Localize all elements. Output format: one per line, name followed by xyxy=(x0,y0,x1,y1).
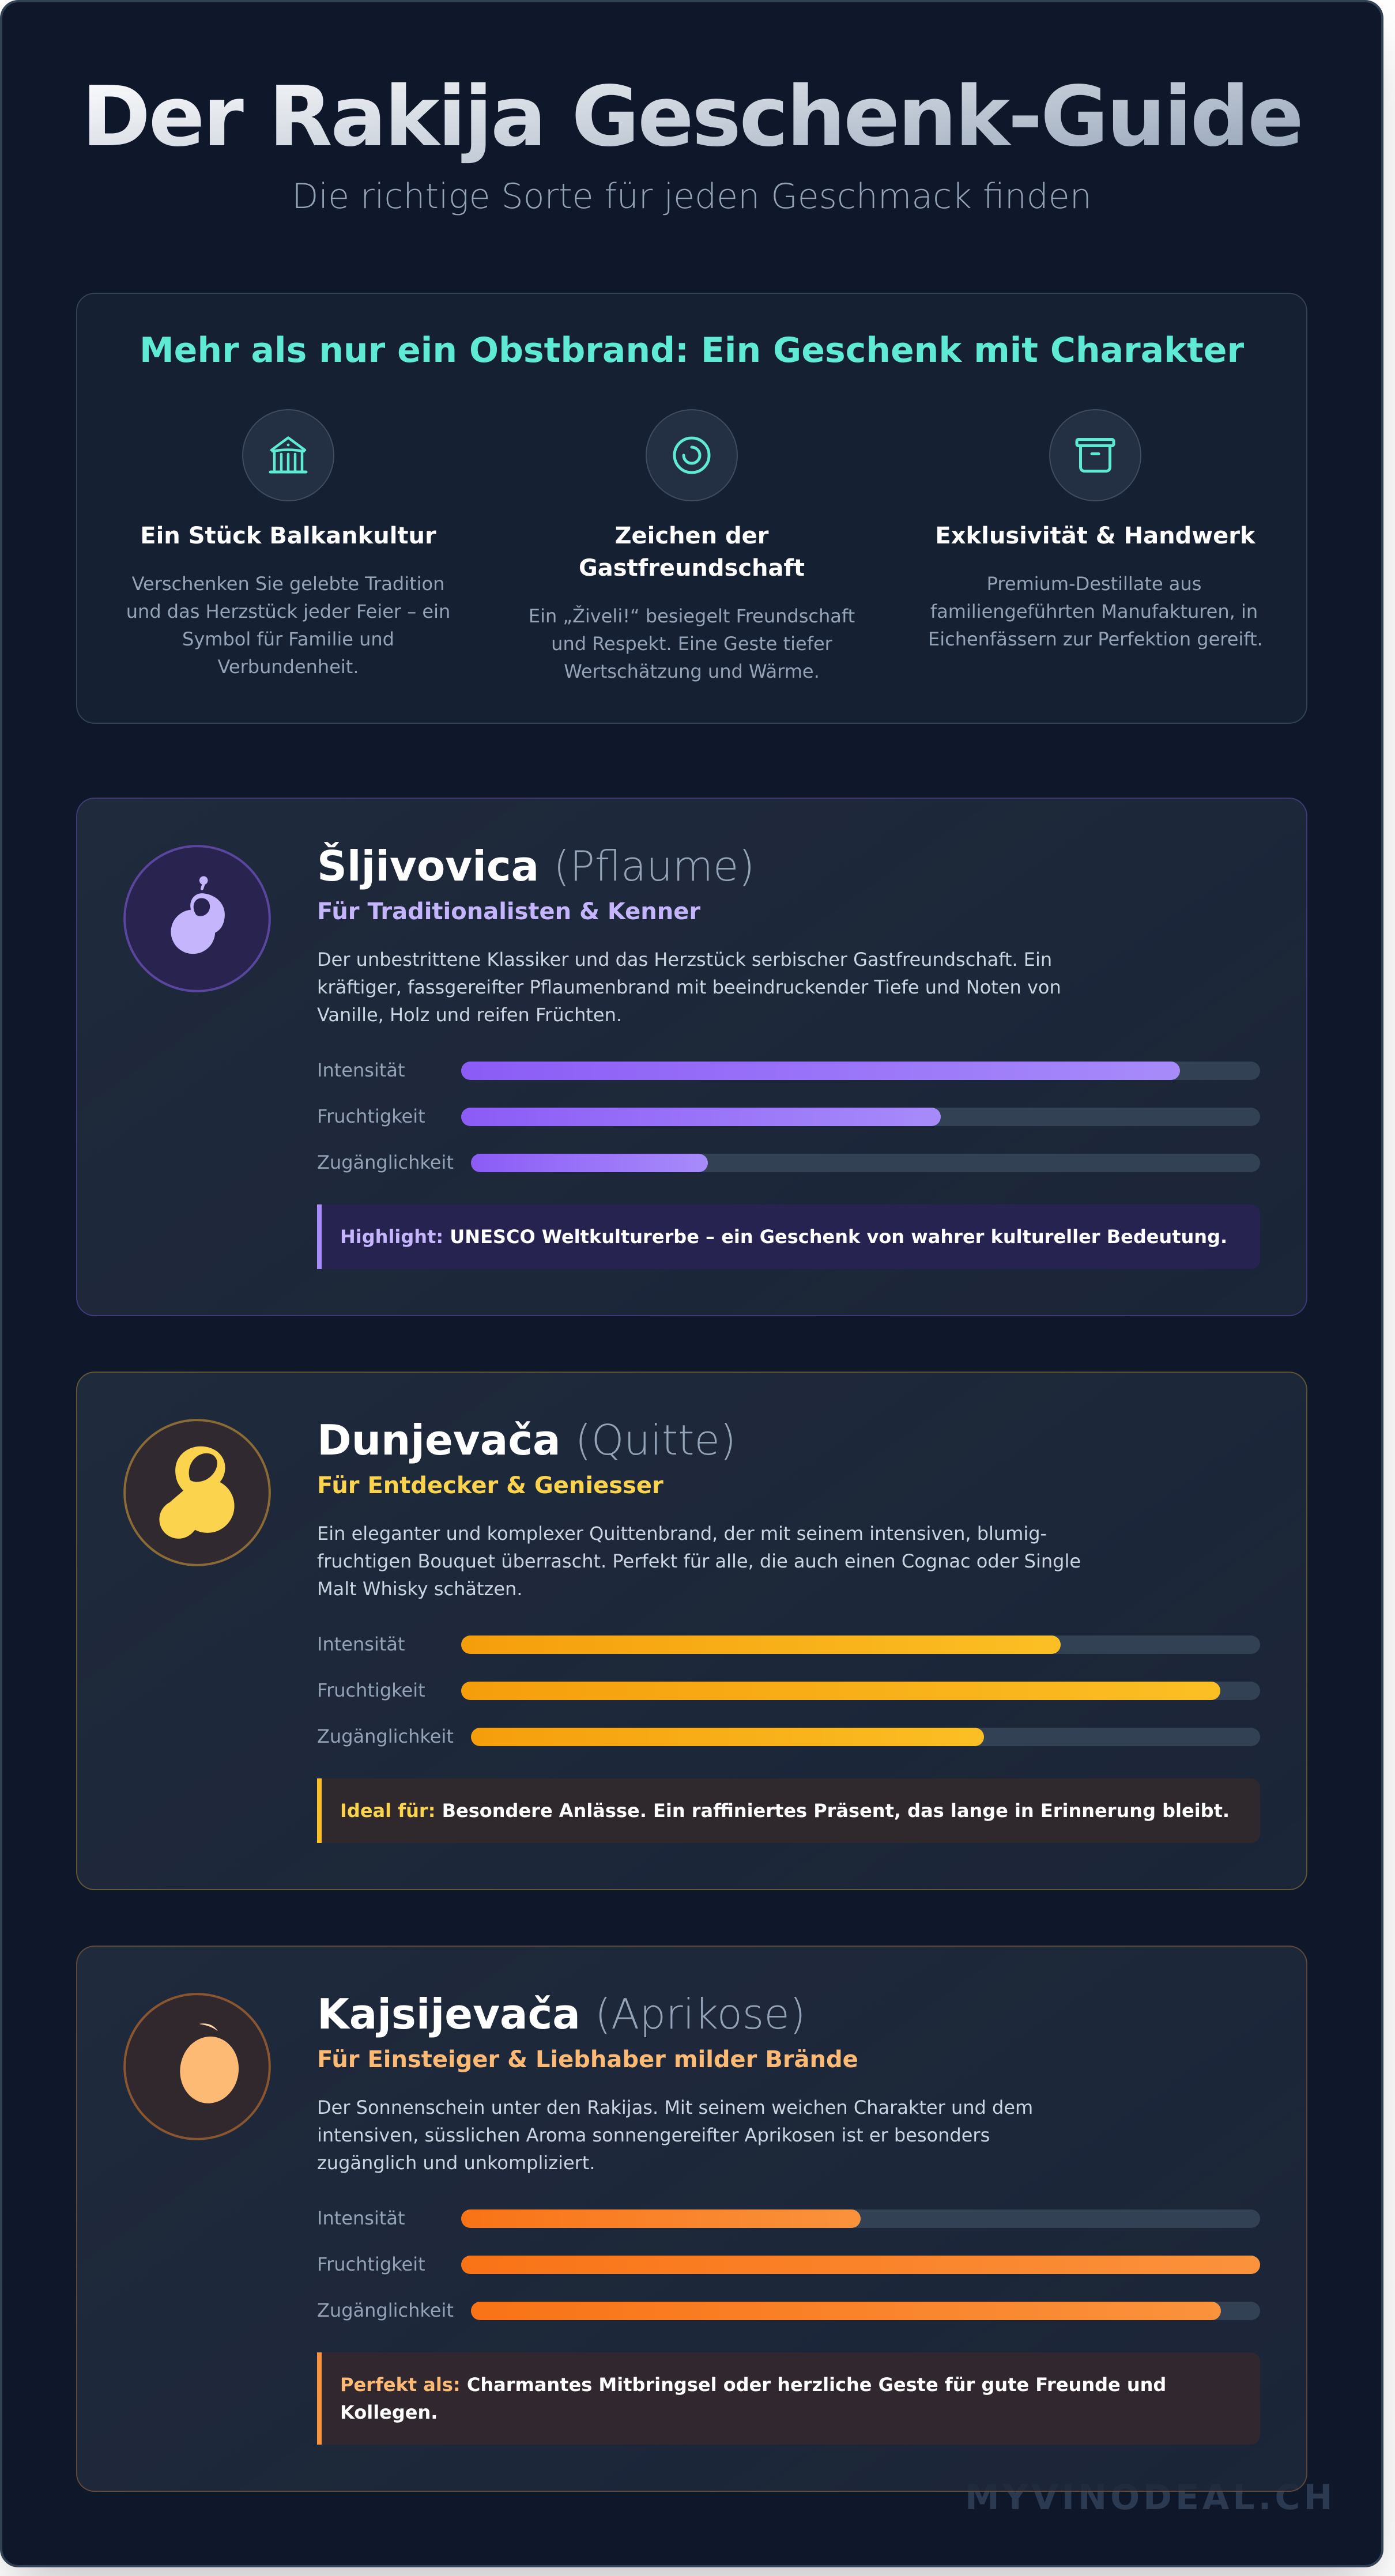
callout xyxy=(317,1204,1260,1269)
callout: Perfekt als: Charmantes Mitbringsel oder herzliche Geste für gute Freunde und xyxy=(340,2374,1166,2396)
description: zugänglich und unkompliziert. xyxy=(317,2152,595,2174)
target audience: Für Entdecker & Geniesser xyxy=(317,1472,663,1499)
bar: Intensität xyxy=(317,1059,1260,1081)
description: fruchtigen Bouquet überrascht. Perfekt für alle, die auch einen Cognac oder Single xyxy=(317,1550,1081,1572)
bar: Zugänglichkeit: Zugänglichkeit xyxy=(317,1151,454,1173)
bar: Fruchtigkeit xyxy=(317,1105,1260,1127)
callout xyxy=(317,2352,1260,2445)
description: intensiven, süsslichen Aroma sonnengereifter Aprikosen ist er besonders xyxy=(317,2124,990,2146)
bar: Zugänglichkeit xyxy=(317,1151,1260,1173)
sort name: Šljivovica (Pflaume) xyxy=(317,842,755,890)
column heading: Exklusivität & Handwerk xyxy=(935,523,1256,549)
description: Vanille, Holz und reifen Früchten. xyxy=(317,1004,622,1026)
callout: Kollegen. xyxy=(340,2401,438,2423)
description: Malt Whisky schätzen. xyxy=(317,1578,522,1600)
watermark: MYVINODEAL.CH xyxy=(965,2477,1336,2518)
description: kräftiger, fassgereifter Pflaumenbrand mit beeindruckender Tiefe und Noten von xyxy=(317,976,1061,998)
column: Gastfreundschaft xyxy=(529,409,855,682)
bar: Intensität xyxy=(317,2205,1260,2233)
column text: und Respekt. Eine Geste tiefer xyxy=(551,633,832,655)
column text: Verbundenheit. xyxy=(218,656,359,678)
intro heading: Mehr als nur ein Obstbrand: Ein Geschenk mit Charakter xyxy=(140,330,1244,371)
bar: Intensität: Intensität xyxy=(317,1059,405,1081)
description xyxy=(317,1523,1081,1600)
icon: box xyxy=(1049,409,1141,501)
column text: Wertschätzung und Wärme. xyxy=(564,660,820,682)
target audience: Für Einsteiger & Liebhaber milder Brände xyxy=(317,2046,858,2073)
column text: Premium-Destillate aus xyxy=(987,573,1201,595)
bar: Zugänglichkeit: Zugänglichkeit xyxy=(317,2299,454,2321)
bar: Intensität xyxy=(317,1633,1260,1655)
icon: temple xyxy=(242,409,334,501)
callout: Highlight: UNESCO Weltkulturerbe – ein Geschenk von wahrer kultureller Bedeutung. xyxy=(340,1226,1227,1248)
bar: Fruchtigkeit xyxy=(317,2251,1260,2279)
bar: Intensität: Intensität xyxy=(317,2207,405,2229)
title: Der Rakija Geschenk-Guide xyxy=(82,68,1302,165)
bar: Fruchtigkeit: Fruchtigkeit xyxy=(317,1105,425,1127)
panel: Šljivovica xyxy=(76,798,1307,1316)
bar: Zugänglichkeit: Zugänglichkeit xyxy=(317,1725,454,1747)
column heading xyxy=(579,523,805,581)
description xyxy=(317,949,1061,1026)
icon: quince xyxy=(123,1419,271,1566)
column: Balkankultur xyxy=(126,409,450,678)
bar: Fruchtigkeit: Fruchtigkeit xyxy=(317,2253,425,2275)
column heading: Zeichen der xyxy=(614,523,769,549)
icon: plum xyxy=(123,845,271,992)
column text xyxy=(529,605,855,682)
column text: Symbol für Familie und xyxy=(182,628,394,650)
description: Der Sonnenschein unter den Rakijas. Mit seinem weichen Charakter und dem xyxy=(317,2097,1033,2118)
column text: und das Herzstück jeder Feier – ein xyxy=(126,600,450,622)
column text xyxy=(928,573,1263,650)
column text: Ein „Živeli!“ besiegelt Freundschaft xyxy=(529,605,855,627)
column text: familiengeführten Manufakturen, in xyxy=(930,600,1258,622)
panel: Dunjevača xyxy=(76,1372,1307,1890)
icon: apricot xyxy=(123,1993,271,2140)
subtitle: Die richtige Sorte für jeden Geschmack finden xyxy=(292,176,1092,217)
column heading: Ein Stück Balkankultur xyxy=(140,523,436,549)
column text: Verschenken Sie gelebte Tradition xyxy=(132,573,444,595)
bar: Intensität: Intensität xyxy=(317,1633,405,1655)
target audience: Für Traditionalisten & Kenner xyxy=(317,898,700,925)
bar: Fruchtigkeit: Fruchtigkeit xyxy=(317,1679,425,1701)
description: Ein eleganter und komplexer Quittenbrand, der mit seinem intensiven, blumig- xyxy=(317,1523,1047,1544)
panel: intro xyxy=(76,293,1307,724)
sort name: Kajsijevača (Aprikose) xyxy=(317,1990,806,2038)
bar: Zugänglichkeit xyxy=(317,1725,1260,1747)
description: Der unbestrittene Klassiker und das Herzstück serbischer Gastfreundschaft. Ein xyxy=(317,949,1052,970)
column text xyxy=(126,573,450,678)
callout xyxy=(317,1778,1260,1843)
callout: Ideal für: Besondere Anlässe. Ein raffiniertes Präsent, das lange in Erinnerung bleibt. xyxy=(340,1800,1230,1822)
icon: spiral xyxy=(646,409,738,501)
column heading: Gastfreundschaft xyxy=(579,555,805,581)
sort name: Dunjevača (Quitte) xyxy=(317,1416,736,1464)
column text: Eichenfässern zur Perfektion gereift. xyxy=(928,628,1263,650)
description xyxy=(317,2094,1033,2177)
panel: Kajsijevača xyxy=(76,1946,1307,2492)
column: Exklusivität xyxy=(928,409,1263,650)
bar: Zugänglichkeit xyxy=(317,2297,1260,2325)
bar: Fruchtigkeit xyxy=(317,1679,1260,1701)
